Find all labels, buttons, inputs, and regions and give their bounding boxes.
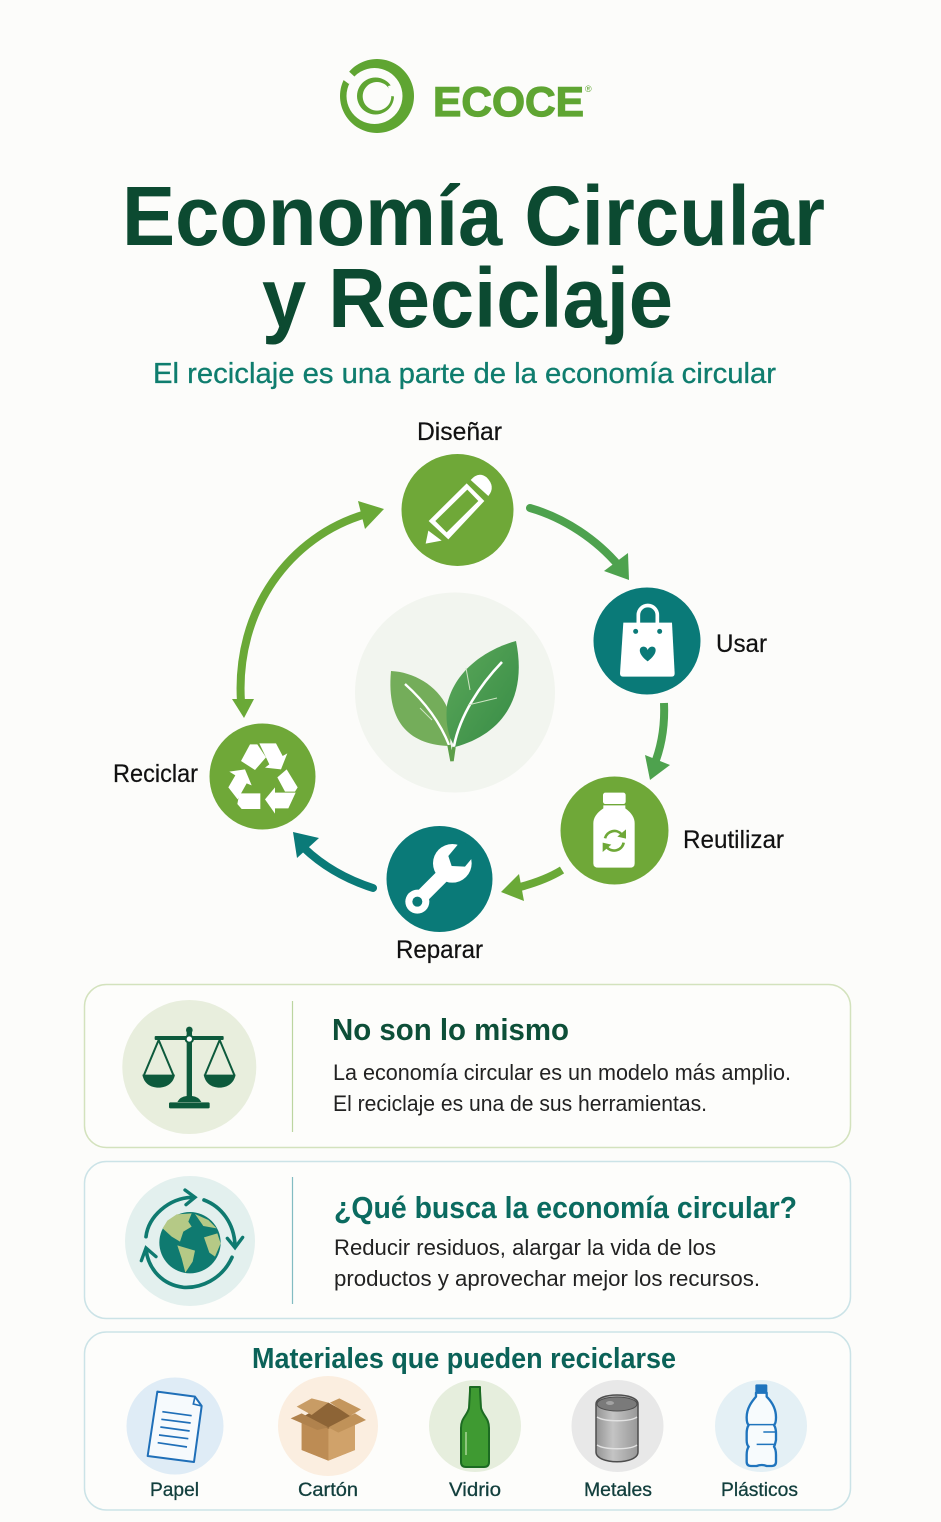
label: Reciclar [113, 760, 198, 788]
material: Papel [126, 1378, 224, 1501]
icon: recycling symbol [228, 743, 298, 814]
label: Plásticos [721, 1479, 798, 1501]
label: Metales [584, 1479, 652, 1501]
circular diagram [113, 418, 784, 964]
panel: no son lo mismo [84, 984, 850, 1148]
icon: shopping bag [620, 605, 675, 677]
heading: Materiales que pueden reciclarse [252, 1343, 676, 1375]
step: Reutilizar [560, 776, 784, 884]
subtitle: El reciclaje es una parte de la economía circular [153, 358, 776, 390]
label: Vidrio [449, 1479, 501, 1501]
icon: logo ring [338, 59, 414, 133]
arrow: reuse to repair [501, 870, 562, 901]
icon: balance scale [122, 1000, 256, 1134]
arrow: repair to recycle [293, 832, 373, 888]
title [122, 169, 825, 345]
title: Economía Circular [122, 169, 825, 263]
label: Reparar [396, 936, 483, 964]
arrow: recycle to design [232, 501, 384, 718]
arrow: use to reuse [645, 703, 670, 780]
logo wordmark: ECOCE [433, 78, 584, 125]
heading: ¿Qué busca la economía circular? [334, 1190, 797, 1225]
title: y Reciclaje [262, 251, 673, 345]
body text: Reducir residuos, alargar la vida de los [334, 1235, 716, 1260]
label: Cartón [298, 1479, 358, 1501]
step: Reciclar [113, 724, 316, 830]
logo: ECOCE [338, 59, 592, 133]
material: Plásticos [715, 1380, 807, 1501]
panel: qué busca la economía circular [84, 1162, 850, 1318]
body text: El reciclaje es una de sus herramientas. [333, 1091, 707, 1116]
center leaf badge [355, 592, 555, 792]
icon: globe with arrows [125, 1176, 255, 1306]
label: Reutilizar [683, 826, 784, 854]
arrow: design to use [530, 508, 629, 580]
registered mark: ® [585, 84, 592, 94]
label: Papel [150, 1479, 199, 1501]
icon: bottle [593, 793, 635, 868]
step: Diseñar [402, 418, 514, 566]
body text [334, 1235, 760, 1291]
heading: No son lo mismo [332, 1012, 569, 1047]
body text: La economía circular es un modelo más amplio. [333, 1060, 791, 1085]
material: Cartón [278, 1376, 378, 1501]
panel: materiales [84, 1332, 850, 1510]
step: Usar [594, 588, 767, 694]
label: Usar [716, 630, 767, 658]
material: Metales [572, 1380, 664, 1501]
body text: productos y aprovechar mejor los recursos. [334, 1266, 760, 1291]
step: Reparar [386, 826, 492, 964]
label: Diseñar [417, 418, 502, 446]
icon: wrench [405, 842, 473, 914]
material: Vidrio [429, 1380, 521, 1501]
body text [333, 1060, 791, 1116]
icon: pencil [426, 475, 492, 544]
